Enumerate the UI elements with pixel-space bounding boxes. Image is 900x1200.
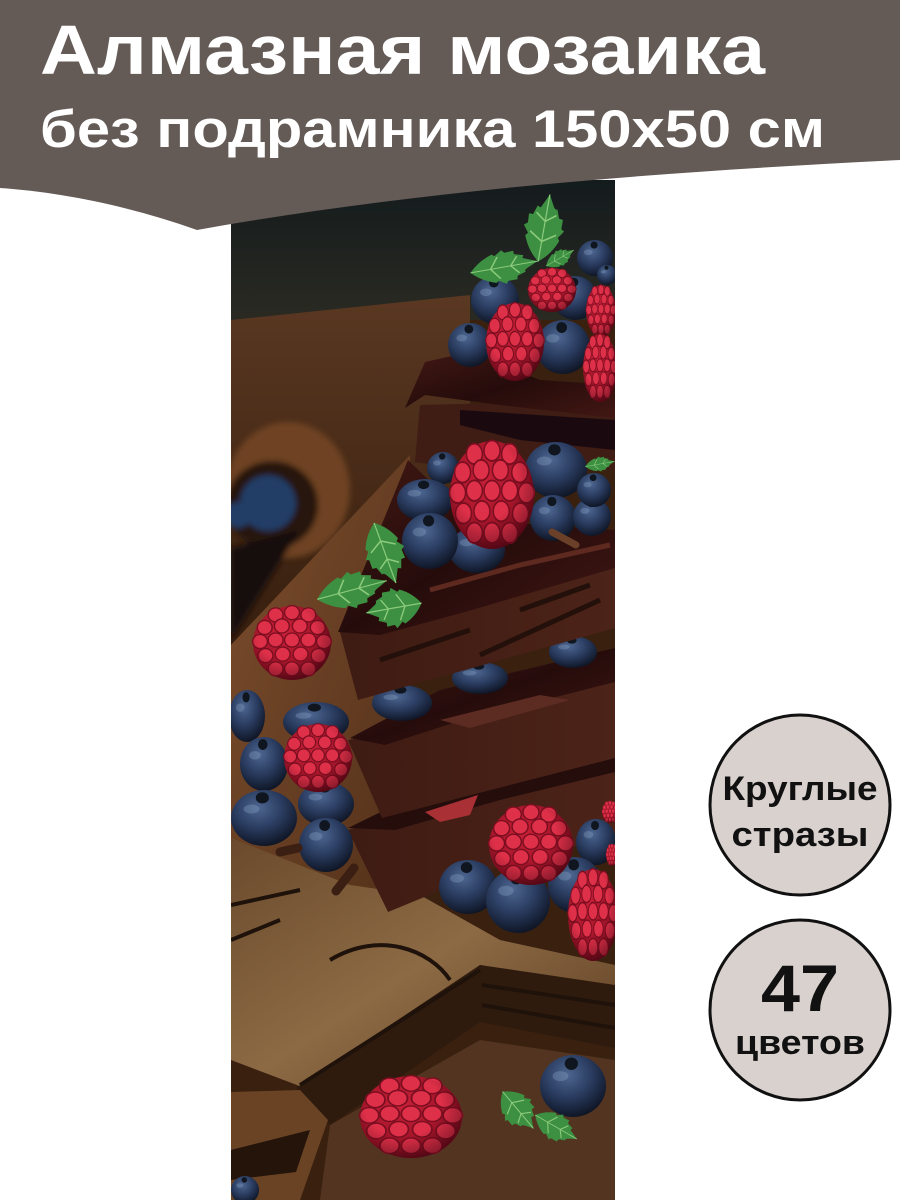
dark blurred background xyxy=(231,180,615,320)
blurred wooden table xyxy=(231,295,470,540)
table in foreground xyxy=(320,1040,615,1200)
photo: chocolate brownies with berries xyxy=(225,180,618,1200)
badge: 47 colours: 47 xyxy=(761,951,839,1025)
paddle rim lines xyxy=(231,890,615,1085)
paddle handle xyxy=(231,1090,328,1200)
wooden board under the cake xyxy=(231,455,410,920)
raspberries xyxy=(253,268,618,1158)
blurred tart in background xyxy=(225,422,350,640)
badge: round rhinestones: Круглые xyxy=(722,770,878,808)
title: Алмазная мозаика xyxy=(40,11,766,89)
handle shadow xyxy=(231,1130,310,1180)
header banner xyxy=(0,0,900,230)
badge: round rhinestones: стразы xyxy=(732,816,868,854)
blueberries tucked between slices xyxy=(372,636,597,721)
badge: 47 colours: цветов xyxy=(735,1024,865,1062)
paddle plank edge xyxy=(296,965,615,1125)
mint leaves xyxy=(312,191,616,1152)
chocolate curls xyxy=(280,532,576,891)
wooden serving paddle xyxy=(231,838,615,1090)
badge: 47 colours xyxy=(710,920,890,1100)
blueberries xyxy=(229,240,617,1200)
badge: round rhinestones xyxy=(710,715,890,895)
middle brownie slice xyxy=(348,648,615,818)
subtitle: без подрамника 150х50 см xyxy=(40,100,825,159)
far brownie slice xyxy=(405,352,615,470)
top brownie slice xyxy=(338,460,615,700)
bottom brownie slice xyxy=(348,755,615,912)
